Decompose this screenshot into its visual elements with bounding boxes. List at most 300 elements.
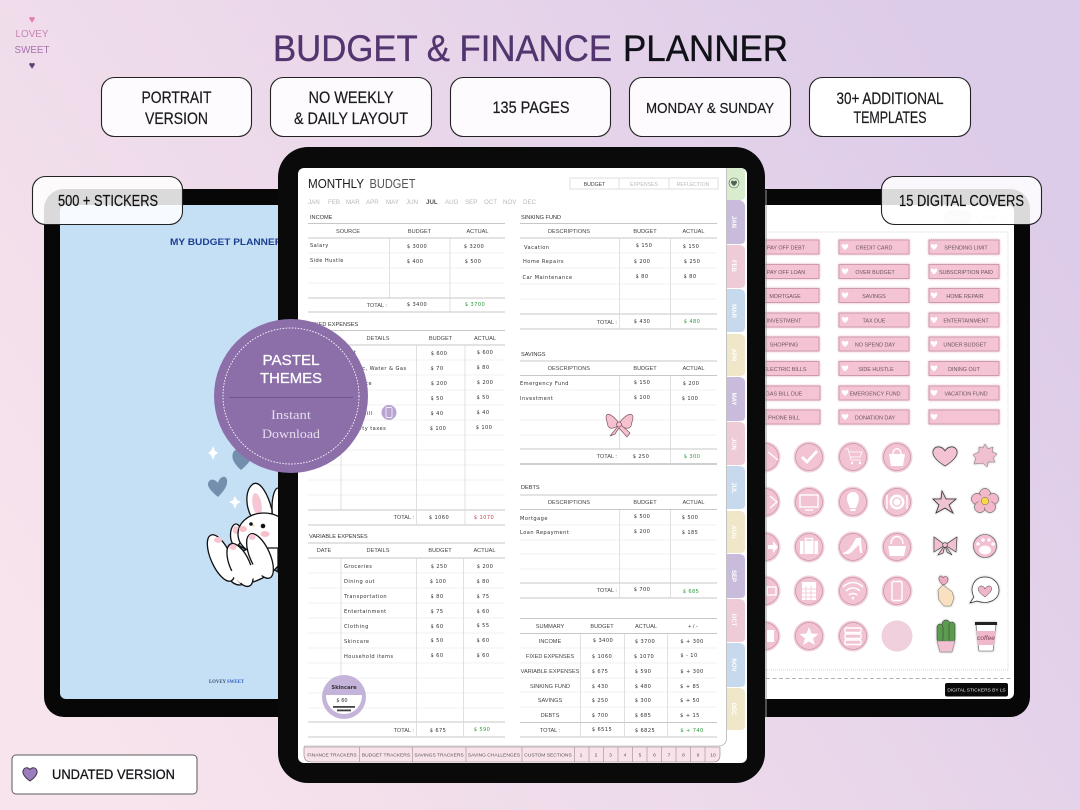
feature chip: additional templates <box>810 78 970 136</box>
table: variable expenses: $ 60 <box>477 638 489 644</box>
label sticker buttons column 2: OVER BUDGET <box>855 270 895 276</box>
left tablet: cover <box>44 189 278 717</box>
label sticker buttons column 3: VACATION FUND <box>944 392 988 398</box>
bottom navigation tabs: 4 <box>624 752 627 758</box>
label sticker buttons column 3: SUBSCRIPTION PAID <box>939 270 993 276</box>
side month tabs: FEB <box>730 260 736 273</box>
bottom navigation tabs: CUSTOM SECTIONS <box>524 752 572 758</box>
chip: 500 stickers: 500 + STICKERS <box>58 193 158 210</box>
table: sinking fund <box>520 215 717 329</box>
bottom navigation tabs: 5 <box>639 752 642 758</box>
table: income: Salary <box>310 243 329 249</box>
table: fixed expenses: Phone bill <box>343 411 372 417</box>
side month tabs: JUL <box>730 482 736 494</box>
illustration: bunny peeking <box>206 482 278 588</box>
side month tabs: NOV <box>730 658 736 672</box>
table: fixed expenses: $ 80 <box>477 365 489 371</box>
table: variable expenses: BUDGET <box>428 548 452 554</box>
month strip: AUG <box>445 199 459 206</box>
icon: hearts and sparkles <box>208 446 252 509</box>
table: variable expenses: $ 75 <box>477 594 489 600</box>
icon: high heel <box>838 532 868 562</box>
table: fixed expenses <box>308 322 505 525</box>
round icon stickers column 2 <box>794 442 824 652</box>
month strip: MAY <box>386 199 399 206</box>
label sticker buttons column 1: PAY OFF LOAN <box>767 270 805 276</box>
table: variable expenses: $ 80 <box>431 594 443 600</box>
sticker: star <box>933 491 956 513</box>
table: savings: $ 250 <box>633 454 649 460</box>
table: sinking fund: $ 480 <box>684 319 700 325</box>
table: summary: $ 3700 <box>635 639 655 645</box>
sticker: coffee cup <box>975 622 997 651</box>
table: sinking fund: SINKING FUND <box>521 215 561 221</box>
side month tabs <box>727 168 745 730</box>
table: variable expenses: $ 60 <box>477 609 489 615</box>
table: income: ACTUAL <box>466 229 489 235</box>
icon: calculator <box>794 576 824 606</box>
table: sinking fund: TOTAL : <box>597 320 617 326</box>
right tablet: digital stickers <box>720 189 1030 717</box>
chip: 15 digital covers: 15 DIGITAL COVERS <box>899 193 1024 210</box>
bottom navigation tabs: SAVING CHALLENGES <box>468 752 521 758</box>
side month tabs: OCT <box>730 614 736 627</box>
bottom navigation tabs: 10 <box>710 752 716 758</box>
icon: suitcase <box>794 532 824 562</box>
callout: undated version <box>12 755 197 794</box>
table: summary: $ + 300 <box>680 669 704 675</box>
table: summary: $ 1070 <box>634 654 654 660</box>
table: summary: VARIABLE EXPENSES <box>521 669 580 675</box>
table: summary: $ 250 <box>592 698 608 704</box>
bottom navigation tabs: SAVINGS TRACKERS <box>414 752 464 758</box>
table: summary: $ 480 <box>635 684 651 690</box>
table: variable expenses: $ 250 <box>431 564 447 570</box>
feature chip: 135 pages <box>450 78 610 136</box>
table: savings: BUDGET <box>633 366 657 372</box>
title: BUDGET & FINANCE <box>273 27 612 69</box>
table: fixed expenses: Rent <box>343 350 356 356</box>
label sticker buttons column 3 <box>929 240 999 424</box>
table: summary: FIXED EXPENSES <box>526 654 574 660</box>
table: variable expenses <box>308 534 505 737</box>
chip: 500 stickers <box>32 176 182 224</box>
table: sinking fund: $ 150 <box>683 244 699 250</box>
bottom navigation tabs: 3 <box>609 752 612 758</box>
sticker: speech bubble <box>970 577 999 603</box>
table: sinking fund: $ 80 <box>636 274 648 280</box>
table: fixed expenses: $ 50 <box>431 396 443 402</box>
label sticker buttons column 1: ELECTRIC BILLS <box>764 367 807 373</box>
sticker sheet tag <box>945 683 1008 696</box>
label sticker buttons column 3: UNDER BUDGET <box>943 342 987 348</box>
table: income: SOURCE <box>336 229 360 235</box>
icon: plate <box>882 486 912 518</box>
table: savings: $ 100 <box>682 396 698 402</box>
table: sinking fund: $ 430 <box>634 319 650 325</box>
month strip: MAR <box>346 199 360 206</box>
feature chip: portrait version: VERSION <box>145 110 208 128</box>
table: fixed expenses: Property taxes <box>343 426 386 432</box>
table: summary: $ 1060 <box>592 654 612 660</box>
table: income: $ 500 <box>465 259 481 265</box>
table: fixed expenses: $ 100 <box>430 426 446 432</box>
table: variable expenses: $ 55 <box>477 623 489 629</box>
table: summary: $ - 10 <box>680 653 698 659</box>
table: fixed expenses: $ 70 <box>431 366 443 372</box>
logo: Lovey Sweet: LOVEY <box>16 29 49 40</box>
label sticker buttons column 2 <box>839 240 909 424</box>
badge: pastel themes, instant download: Instant <box>271 407 311 422</box>
table: income: TOTAL : <box>367 303 387 309</box>
feature chip: no weekly and daily layout: NO WEEKLY <box>308 89 394 107</box>
table: sinking fund: $ 250 <box>684 259 700 265</box>
table: debts: Mortgage <box>520 516 548 522</box>
page tabs: BUDGET <box>584 182 606 188</box>
table: savings: DESCRIPTIONS <box>548 366 590 372</box>
bottom navigation tabs: 9 <box>697 752 700 758</box>
label sticker buttons column 3: DINING OUT <box>948 367 981 373</box>
table: income: $ 3700 <box>465 302 485 308</box>
table: summary: $ + 300 <box>680 639 704 645</box>
table: fixed expenses: Internet <box>343 396 367 402</box>
badge: pastel themes, instant download: Download <box>262 426 321 441</box>
month strip: DEC <box>523 199 537 206</box>
table: fixed expenses: BUDGET <box>429 336 453 342</box>
sticker: coffee cup: coffee <box>977 635 995 642</box>
badge: pastel themes, instant download: THEMES <box>260 371 322 387</box>
table: sinking fund: Vacation <box>524 245 550 251</box>
label sticker buttons column 2: CREDIT CARD <box>856 246 892 252</box>
table: fixed expenses: ACTUAL <box>474 336 496 342</box>
label sticker buttons column 3: SPENDING LIMIT <box>944 246 988 252</box>
bottom navigation tabs: 6 <box>653 752 656 758</box>
table: debts: $ 500 <box>682 515 698 521</box>
sticker: bow <box>934 537 957 555</box>
table: variable expenses: DETAILS <box>367 548 390 554</box>
side month tabs: APR <box>730 349 736 362</box>
icon: star <box>794 620 824 652</box>
table: fixed expenses: $ 200 <box>477 380 493 386</box>
sticker: flower <box>972 488 998 512</box>
sticker: finger heart <box>938 576 954 606</box>
label sticker buttons column 1: MORTGAGE <box>769 294 801 300</box>
table: variable expenses: Dining out <box>344 579 375 585</box>
table: variable expenses: Skincare <box>344 639 369 645</box>
decorative stickers <box>933 444 999 652</box>
label sticker buttons column 2: EMERGENCY FUND <box>849 392 901 398</box>
side month tabs: AUG <box>730 525 736 539</box>
table: income: BUDGET <box>408 229 432 235</box>
table: fixed expenses: TOTAL : <box>394 515 414 521</box>
table: variable expenses: $ 50 <box>431 638 443 644</box>
label sticker buttons column 1 <box>752 240 820 424</box>
table: variable expenses: ACTUAL <box>473 548 496 554</box>
label sticker buttons column 1: INVESTMENT <box>767 318 802 324</box>
table: savings <box>520 352 717 464</box>
table: fixed expenses: $ 200 <box>431 381 447 387</box>
sticker: heart <box>933 447 957 466</box>
side month tabs: SEP <box>730 570 736 582</box>
table: summary: $ 6515 <box>592 727 612 733</box>
table: debts: $ 200 <box>634 529 650 535</box>
table: variable expenses: Entertainment <box>344 609 387 615</box>
chip: 15 digital covers <box>882 176 1042 224</box>
table: summary: $ 6825 <box>635 728 655 734</box>
table: variable expenses: $ 75 <box>431 609 443 615</box>
table: summary: SINKING FUND <box>530 684 570 690</box>
table: sinking fund: BUDGET <box>633 229 657 235</box>
table: debts: ACTUAL <box>682 500 705 506</box>
side month tabs: JAN <box>730 216 736 228</box>
table: summary: $ 590 <box>635 669 651 675</box>
icon: phone <box>882 576 912 606</box>
table: income: Side Hustle <box>310 258 344 264</box>
table: summary: $ + 15 <box>680 713 700 719</box>
month strip <box>308 199 537 206</box>
table: summary: TOTAL : <box>540 728 561 734</box>
table: income: $ 3000 <box>407 244 427 250</box>
logo: Lovey Sweet: ♥ <box>29 60 35 72</box>
feature chip: monday and sunday: MONDAY & SUNDAY <box>646 100 774 117</box>
sticker sheet border <box>740 232 1008 670</box>
bottom navigation tabs: FINANCE TRACKERS <box>307 752 357 758</box>
table: summary: $ + 85 <box>680 684 700 690</box>
table: variable expenses: $ 100 <box>430 579 446 585</box>
label sticker buttons column 2: SAVINGS <box>862 294 886 300</box>
table: summary: SUMMARY <box>536 624 565 630</box>
table: debts <box>520 485 717 598</box>
icon: shopping bag <box>882 442 912 472</box>
table: fixed expenses: $ 1070 <box>474 515 494 521</box>
table: summary: INCOME <box>539 639 561 645</box>
sticker: leaf <box>973 444 997 467</box>
table: fixed expenses: $ 600 <box>477 350 493 356</box>
table: summary: + / - <box>688 624 698 630</box>
table: debts: DEBTS <box>521 485 540 491</box>
feature chip: 135 pages: 135 PAGES <box>492 99 570 117</box>
table: sinking fund: $ 80 <box>684 274 696 280</box>
skincare sticker: Skincare <box>331 685 357 691</box>
table: summary: $ + 740 <box>680 728 704 734</box>
table: savings: $ 200 <box>683 381 699 387</box>
table: savings: $ 300 <box>684 454 700 460</box>
table: variable expenses: $ 80 <box>477 579 489 585</box>
table: fixed expenses: $ 40 <box>477 410 489 416</box>
round icon stickers column 4 <box>882 442 912 652</box>
feature chip: no weekly and daily layout: & DAILY LAYOUT <box>294 110 408 128</box>
table: sinking fund: DESCRIPTIONS <box>548 229 590 235</box>
table: fixed expenses: $ 100 <box>476 425 492 431</box>
bottom navigation tabs: 8 <box>682 752 685 758</box>
badge: pastel themes, instant download: PASTEL <box>262 353 320 369</box>
month strip: SEP <box>465 199 477 206</box>
table: debts: BUDGET <box>633 500 657 506</box>
table: variable expenses: TOTAL : <box>394 728 414 734</box>
bottom navigation tabs: BUDGET TRACKERS <box>362 752 411 758</box>
table: fixed expenses: $ 1060 <box>429 515 449 521</box>
icon: pink bow <box>606 414 633 437</box>
table: savings: $ 150 <box>634 380 650 386</box>
label sticker buttons column 2: DONATION DAY <box>855 416 896 422</box>
page tabs: REFLECTION <box>677 182 710 188</box>
side month tabs: MAY <box>730 393 736 405</box>
table: debts: $ 500 <box>634 514 650 520</box>
label sticker buttons column 1: GAS BILL DUE <box>766 392 803 398</box>
label sticker buttons column 1: PHONE BILL <box>768 416 800 422</box>
table: debts: TOTAL : <box>597 588 617 594</box>
skincare sticker: $ 60 <box>336 698 348 704</box>
logo: Lovey Sweet: SWEET <box>14 45 50 56</box>
feature chip: additional templates: TEMPLATES <box>854 109 926 127</box>
table: fixed expenses: Insurance <box>343 381 372 387</box>
table: income: INCOME <box>310 215 333 221</box>
table: fixed expenses: $ 40 <box>431 411 443 417</box>
page tabs: EXPENSES <box>630 182 659 188</box>
table: debts: $ 700 <box>634 587 650 593</box>
table: sinking fund: Car Maintenance <box>522 275 572 281</box>
table: summary: $ + 50 <box>680 698 700 704</box>
table: savings: SAVINGS <box>521 352 546 358</box>
page pills: Page 1 <box>948 216 968 222</box>
table: summary: $ 685 <box>635 713 651 719</box>
month strip: JUL <box>426 199 438 206</box>
table: sinking fund: $ 200 <box>634 259 650 265</box>
label sticker buttons column 2: TAX DUE <box>863 318 886 324</box>
table: savings: Emergency Fund <box>520 381 569 387</box>
icon: bulb <box>838 486 868 518</box>
feature chip: monday and sunday <box>630 78 790 136</box>
icon: purple heart <box>23 768 37 781</box>
feature chip: portrait version <box>102 78 252 136</box>
page heading: BUDGET <box>370 177 416 191</box>
icon: phone sticker <box>382 405 396 420</box>
sticker sheet tag: DIGITAL STICKERS BY LS <box>947 688 1006 694</box>
table: variable expenses: Household items <box>344 654 394 660</box>
table: debts: $ 685 <box>683 589 699 595</box>
logo: Lovey Sweet <box>14 14 50 72</box>
table: debts: $ 185 <box>682 530 698 536</box>
bottom navigation tabs <box>304 747 720 762</box>
icon: cart <box>838 442 868 472</box>
table: savings: $ 100 <box>634 395 650 401</box>
month strip: JAN <box>308 199 320 206</box>
table: summary: BUDGET <box>590 624 614 630</box>
table: summary: SAVINGS <box>538 698 562 704</box>
feature chip: no weekly and daily layout <box>270 78 432 136</box>
month strip: OCT <box>484 199 497 206</box>
month strip: JUN <box>406 199 418 206</box>
icon: books <box>838 620 868 652</box>
table: sinking fund: $ 150 <box>636 243 652 249</box>
table: variable expenses: DATE <box>317 548 332 554</box>
callout: undated version: UNDATED VERSION <box>52 767 175 782</box>
table: debts: Loan Repayment <box>520 530 569 536</box>
skincare sticker <box>322 675 366 719</box>
table: variable expenses: $ 590 <box>474 727 490 733</box>
label sticker buttons column 3: HOME REPAIR <box>946 294 984 300</box>
table: summary: $ 675 <box>592 669 608 675</box>
sticker: paw <box>974 534 996 558</box>
icon: blank circle <box>882 620 912 652</box>
page pills: Page 2 <box>982 216 1002 222</box>
table: savings: TOTAL : <box>597 454 617 460</box>
table: summary: ACTUAL <box>635 624 657 630</box>
table: income: $ 400 <box>407 259 423 265</box>
center tablet: monthly budget page <box>278 147 765 783</box>
label sticker buttons column 1: PAY OFF DEBT <box>767 246 806 252</box>
side month tabs: DEC <box>730 703 736 716</box>
month strip: NOV <box>503 199 517 206</box>
table: fixed expenses: Electric, Water & Gas <box>343 366 407 372</box>
bottom navigation tabs: 1 <box>580 752 583 758</box>
bottom navigation tabs: 2 <box>595 752 598 758</box>
round icon stickers partial column <box>750 442 780 652</box>
table: variable expenses: Transportation <box>343 594 387 600</box>
page tabs <box>570 178 718 189</box>
table: variable expenses: $ 60 <box>477 653 489 659</box>
table: income: $ 3200 <box>464 244 484 250</box>
feature chip: additional templates: 30+ ADDITIONAL <box>836 90 944 108</box>
table: variable expenses: $ 675 <box>430 728 446 734</box>
page heading <box>308 177 416 191</box>
icon: cupcake <box>882 532 912 562</box>
month strip: FEB <box>328 199 340 206</box>
table: debts: DESCRIPTIONS <box>548 500 590 506</box>
label sticker buttons column 2: SIDE HUSTLE <box>858 367 894 373</box>
icon: wifi <box>838 576 868 606</box>
table: fixed expenses: $ 50 <box>477 395 489 401</box>
table: sinking fund: Home Repairs <box>523 259 564 265</box>
table: income <box>308 215 505 312</box>
table: summary: $ 3400 <box>593 638 613 644</box>
table: sinking fund: ACTUAL <box>682 229 705 235</box>
table: summary: $ 700 <box>592 713 608 719</box>
title: PLANNER <box>623 27 788 69</box>
table: income: $ 3400 <box>407 302 427 308</box>
cover title: MY BUDGET PLANNER <box>170 237 282 248</box>
side month tabs: JUN <box>730 438 736 450</box>
table: fixed expenses: FIXED EXPENSES <box>310 322 358 328</box>
table: variable expenses: $ 200 <box>477 564 493 570</box>
table: variable expenses: $ 60 <box>431 624 443 630</box>
icon: check <box>794 442 824 472</box>
feature chip: portrait version: PORTRAIT <box>142 89 212 107</box>
logo: Lovey Sweet: ♥ <box>29 14 35 26</box>
table: fixed expenses: $ 600 <box>431 351 447 357</box>
table: summary: DEBTS <box>541 713 560 719</box>
table: variable expenses: VARIABLE EXPENSES <box>309 534 368 540</box>
table: summary: $ 430 <box>592 684 608 690</box>
month strip: APR <box>366 199 379 206</box>
round icon stickers column 3 <box>838 442 868 652</box>
cover brand: LOVEY SWEET <box>209 680 245 685</box>
table: variable expenses: Clothing <box>344 624 369 630</box>
table: summary <box>520 618 717 737</box>
page pills <box>943 210 1006 225</box>
table: fixed expenses: DETAILS <box>367 336 390 342</box>
label sticker buttons column 3: ENTERTAINMENT <box>943 318 989 324</box>
badge: pastel themes, instant download <box>214 319 368 473</box>
icon: monitor <box>794 486 824 518</box>
table: savings: ACTUAL <box>682 366 705 372</box>
table: summary: $ 300 <box>635 698 651 704</box>
table: variable expenses: Groceries <box>344 564 372 570</box>
side month tabs: MAR <box>730 304 736 318</box>
sticker: cactus <box>937 620 955 652</box>
label sticker buttons column 2: NO SPEND DAY <box>855 342 896 348</box>
table: variable expenses: $ 60 <box>431 653 443 659</box>
